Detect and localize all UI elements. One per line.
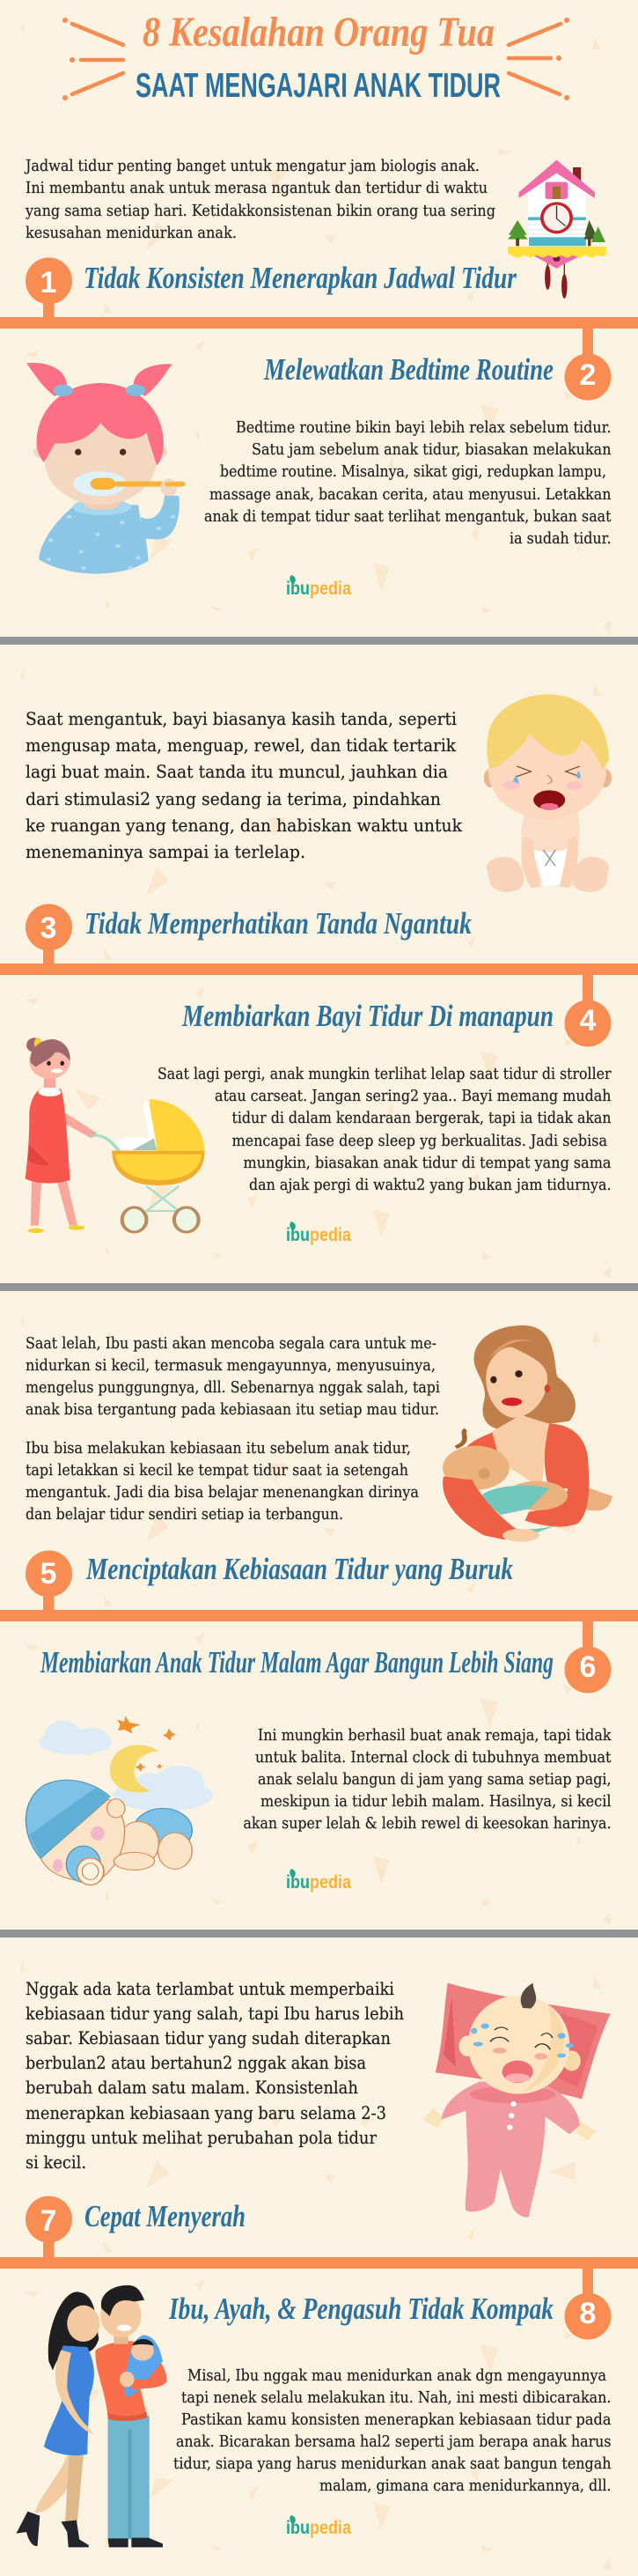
intro text: Jadwal tidur penting banget untuk mengatur jam biologis anak. bbox=[24, 157, 480, 175]
icon: sleeping baby with moon bbox=[26, 1716, 212, 1885]
body text 5: anak bisa tergantung pada kebiasaan itu setiap mau tidur. bbox=[26, 1400, 439, 1419]
intro text bbox=[24, 157, 495, 242]
panel: mistake 8 bbox=[16, 2269, 612, 2547]
divider bar grey 2 bbox=[0, 1283, 638, 1291]
body text 7: si kecil. bbox=[26, 2152, 86, 2173]
body text 3 bbox=[26, 708, 463, 862]
icon: cuckoo clock house bbox=[508, 160, 606, 299]
icon: crying baby bbox=[484, 694, 612, 892]
body text 7: Nggak ada kata terlambat untuk memperbaiki bbox=[26, 1979, 394, 1999]
icon: girl brushing teeth bbox=[26, 363, 185, 573]
number pin 7: 7 bbox=[40, 2204, 56, 2238]
body text 5: Saat lelah, Ibu pasti akan mencoba segala cara untuk me- bbox=[26, 1334, 436, 1353]
icon: mother breastfeeding bbox=[443, 1325, 612, 1542]
body text 7: kebiasaan tidur yang salah, tapi Ibu harus lebih bbox=[26, 2004, 404, 2024]
heading text 7: Cepat Menyerah bbox=[84, 2199, 246, 2233]
body text 5: Ibu bisa melakukan kebiasaan itu sebelum anak tidur, bbox=[26, 1439, 411, 1458]
body text 6 bbox=[243, 1726, 612, 1833]
icon: crying baby on pillow bbox=[423, 1983, 611, 2218]
logo 6: ibupedia bbox=[286, 1872, 351, 1893]
body text 2 bbox=[204, 418, 612, 548]
body text 5: dan belajar tidur sendiri setiap ia terbangun. bbox=[26, 1505, 343, 1524]
divider bar orange 3 bbox=[0, 1610, 638, 1621]
number pin 4: 4 bbox=[580, 1004, 597, 1037]
title rays bbox=[62, 18, 569, 100]
divider bar orange 4 bbox=[0, 2257, 638, 2269]
number pin 4 bbox=[565, 975, 611, 1046]
panel: mistake 3 bbox=[26, 694, 612, 965]
panel: mistake 5 bbox=[26, 1325, 612, 1612]
number pin 5: 5 bbox=[40, 1557, 56, 1591]
intro text: kesusahan menidurkan anak. bbox=[26, 224, 237, 242]
body text 7: sabar. Kebiasaan tidur yang sudah diterapkan bbox=[26, 2028, 391, 2048]
number pin 5 bbox=[26, 1550, 72, 1612]
heading text 2: Melewatkan Bedtime Routine bbox=[263, 352, 554, 387]
icon: family with baby bbox=[16, 2285, 167, 2547]
panel: mistake 6 bbox=[26, 1621, 612, 1893]
number pin 3: 3 bbox=[40, 912, 56, 945]
logo 2: ibupedia bbox=[286, 579, 351, 599]
body text 7: minggu untuk melihat perubahan pola tidur bbox=[26, 2128, 378, 2148]
title bbox=[62, 9, 569, 105]
heading text 5: Menciptakan Kebiasaan Tidur yang Buruk bbox=[85, 1552, 513, 1586]
intro text: yang sama setiap hari. Ketidakkonsistenan bikin orang tua sering bbox=[25, 202, 495, 220]
number pin 8: 8 bbox=[580, 2297, 596, 2330]
body text 7: berubah dalam satu malam. Konsistenlah bbox=[26, 2078, 358, 2098]
body text 3: mengusap mata, menguap, rewel, dan tidak tertarik bbox=[26, 734, 457, 756]
number pin 1 bbox=[26, 257, 72, 320]
body text 5: mengelus punggungnya, dll. Sebenarnya nggak salah, tapi bbox=[26, 1378, 440, 1397]
body text 2: ia sudah tidur. bbox=[510, 529, 611, 548]
divider bar orange 1 bbox=[0, 317, 638, 328]
body text 3: Saat mengantuk, bayi biasanya kasih tanda, seperti bbox=[26, 708, 457, 729]
body text 7: berbulan2 atau bertahun2 nggak akan bisa bbox=[26, 2053, 366, 2073]
body text 5: nidurkan si kecil, termasuk mengayunnya, menyusuinya, bbox=[26, 1356, 436, 1375]
number pin 6: 6 bbox=[580, 1650, 596, 1684]
body text 4 bbox=[158, 1065, 612, 1194]
logo 4: ibupedia bbox=[286, 1225, 351, 1245]
body text 3: ke ruangan yang tenang, dan habiskan waktu untuk bbox=[26, 815, 463, 836]
heading text 3: Tidak Memperhatikan Tanda Ngantuk bbox=[84, 906, 472, 941]
divider bar grey 1 bbox=[0, 637, 638, 645]
number pin 2 bbox=[565, 328, 611, 400]
body text 3: lagi buat main. Saat tanda itu muncul, jauhkan dia bbox=[26, 761, 448, 782]
icon: mother with stroller bbox=[26, 1037, 205, 1233]
body text 3: dari stimulasi2 yang sedang ia terima, pindahkan bbox=[26, 788, 441, 809]
divider bar orange 2 bbox=[0, 963, 638, 975]
number pin 8 bbox=[565, 2269, 611, 2339]
body text 7 bbox=[26, 1979, 404, 2173]
number pin 7 bbox=[26, 2196, 72, 2259]
title line 1: 8 Kesalahan Orang Tua bbox=[143, 9, 495, 55]
panel: mistake 7 bbox=[26, 1979, 611, 2259]
number pin 1: 1 bbox=[40, 266, 56, 299]
heading: mistake 1 bbox=[26, 257, 517, 320]
body text 7: menerapkan kebiasaan yang baru selama 2-3 bbox=[26, 2103, 386, 2123]
body text 5: mengantuk. Jadi dia bisa belajar menenangkan dirinya bbox=[26, 1483, 419, 1502]
panel: mistake 4 bbox=[26, 975, 612, 1245]
body text 3: menemaninya sampai ia terlelap. bbox=[26, 841, 305, 862]
divider bar grey 3 bbox=[0, 1930, 638, 1938]
number pin 2: 2 bbox=[580, 358, 596, 392]
heading text 1: Tidak Konsisten Menerapkan Jadwal Tidur bbox=[84, 261, 517, 295]
body text 5 bbox=[26, 1334, 440, 1524]
number pin 3 bbox=[26, 904, 72, 965]
body text 5: tapi letakkan si kecil ke tempat tidur saat ia setengah bbox=[26, 1461, 408, 1480]
body text 8 bbox=[173, 2366, 612, 2495]
panel: mistake 2 bbox=[26, 328, 612, 599]
number pin 6 bbox=[565, 1621, 611, 1693]
intro text: Ini membantu anak untuk merasa ngantuk dan tertidur di waktu bbox=[26, 179, 488, 197]
logo 8: ibupedia bbox=[286, 2518, 351, 2538]
